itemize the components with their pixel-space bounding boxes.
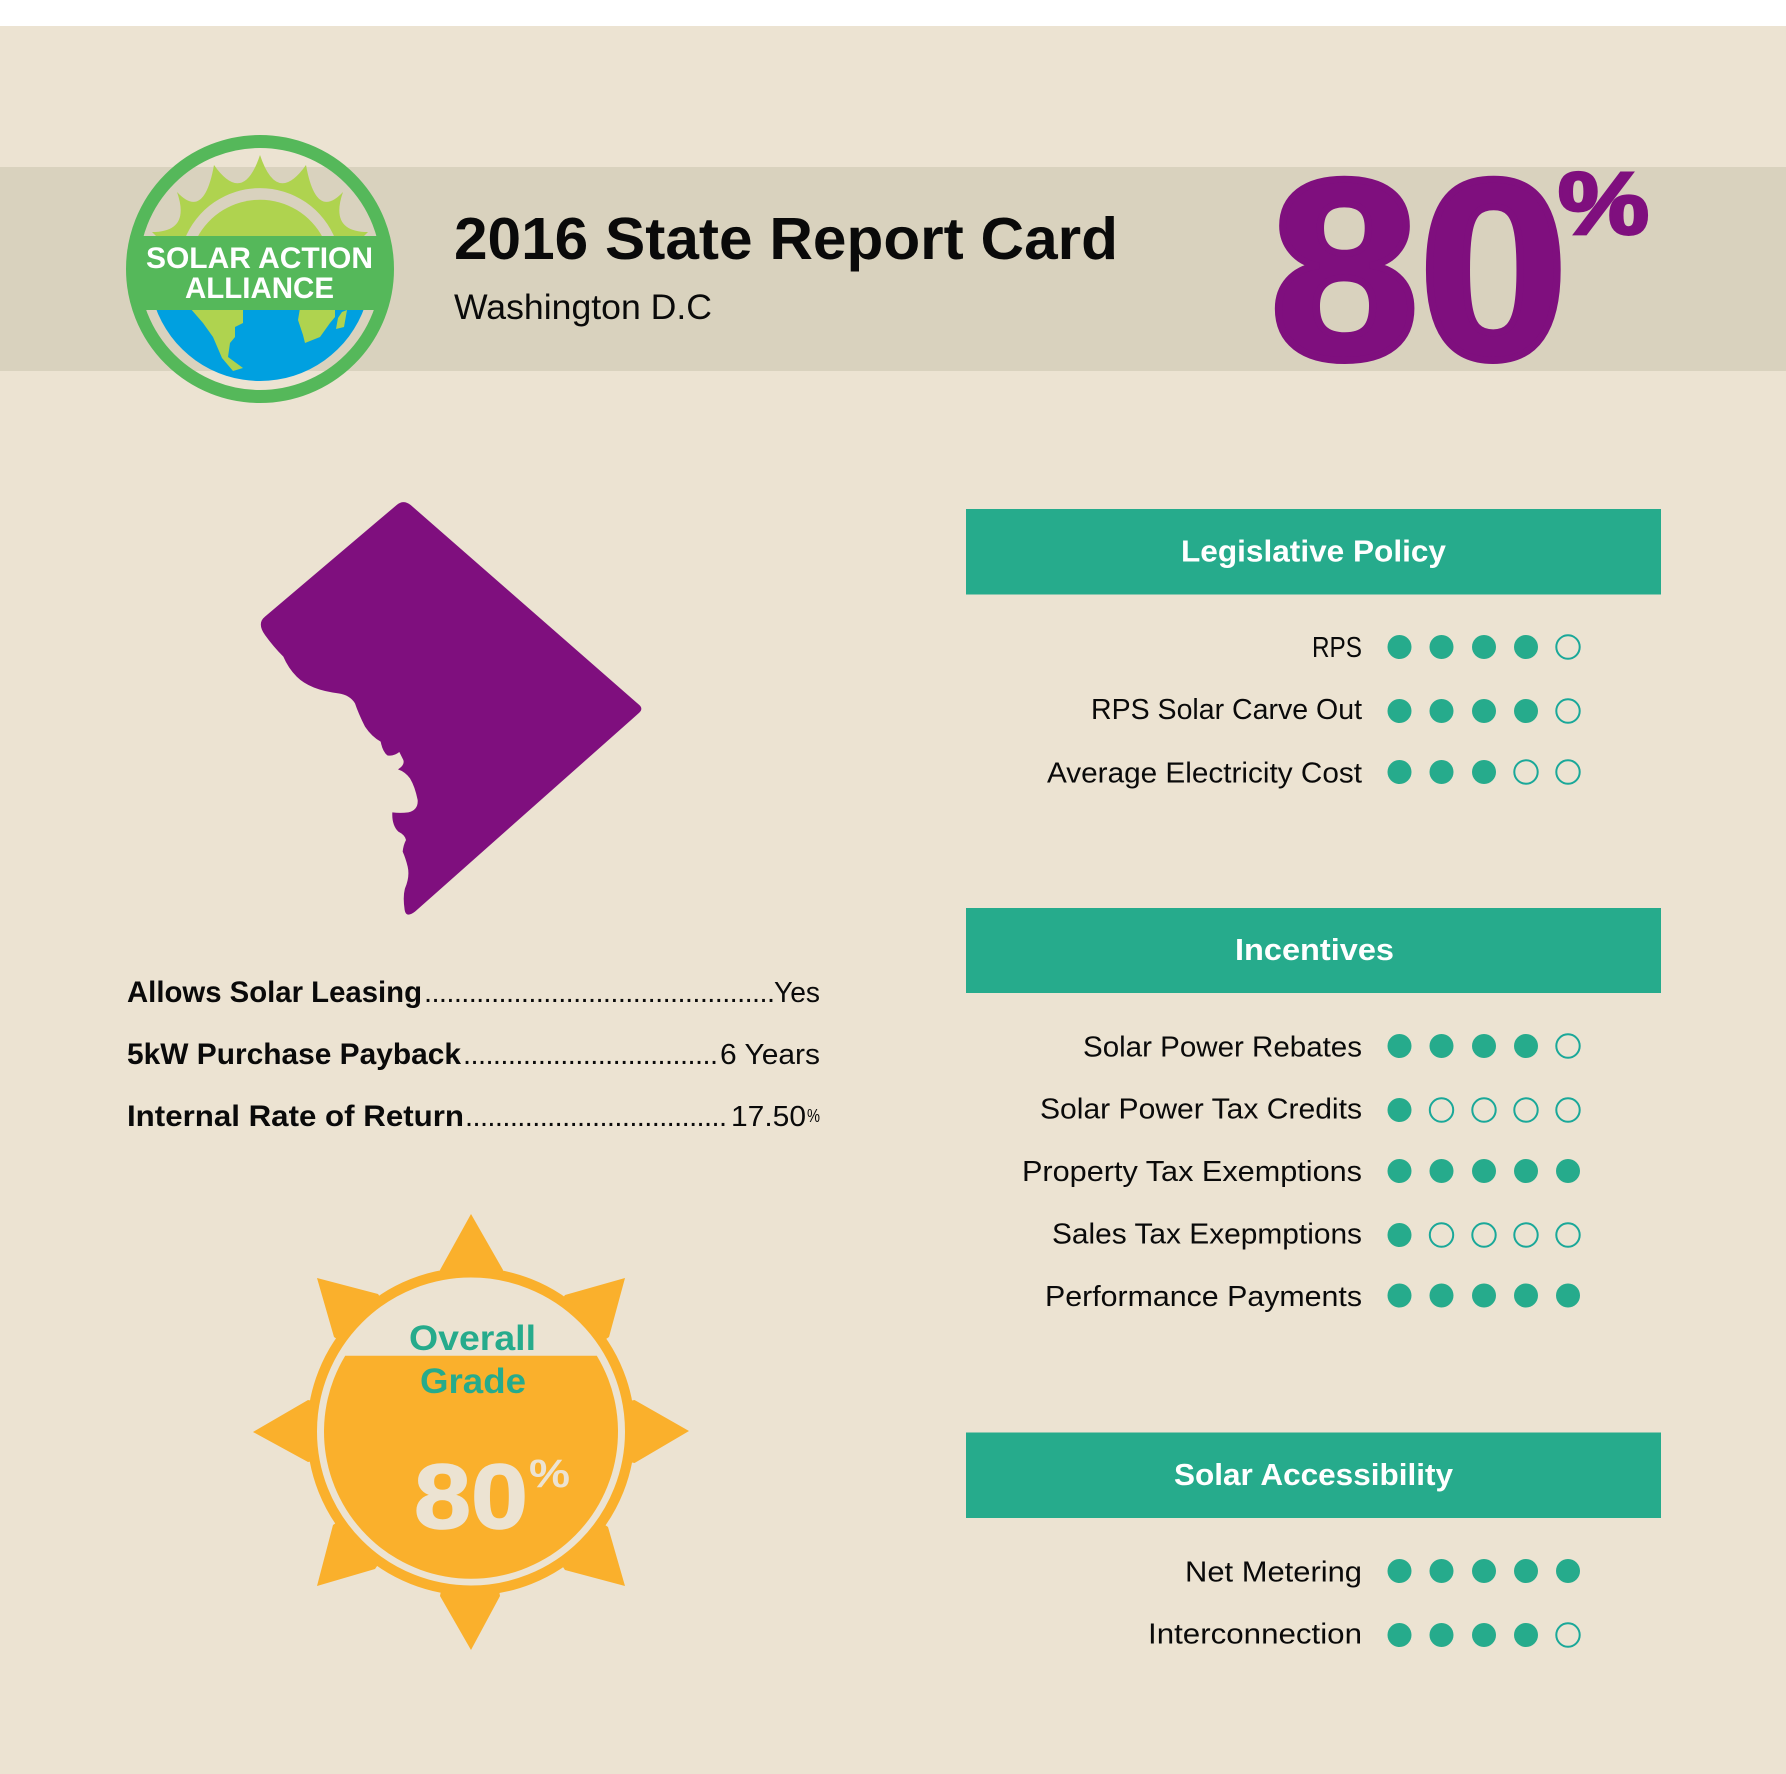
label: Grade: Grade	[420, 1362, 526, 1401]
panel: Incentives	[966, 908, 1661, 1313]
stat: internal rate of return: ...................................	[465, 1101, 727, 1133]
row: Average Electricity Cost	[1047, 758, 1580, 790]
row: Sales Tax Exepmptions: Sales Tax Exepmptions	[1052, 1218, 1362, 1250]
logo: Africa	[298, 308, 335, 343]
stats list	[127, 976, 820, 1133]
row: RPS Solar Carve Out	[1091, 694, 1580, 726]
label: Overall: Overall	[409, 1319, 536, 1358]
row: Solar Power Rebates	[1083, 1032, 1580, 1064]
logo: sun rays	[152, 155, 368, 240]
row: RPS: RPS	[1312, 632, 1362, 664]
stat: internal rate of return: 17.50	[731, 1101, 806, 1133]
heading text: Incentives	[1235, 932, 1394, 967]
stat: internal rate of return	[127, 1100, 820, 1133]
stat: allows solar leasing: Yes	[774, 977, 820, 1009]
row: RPS Solar Carve Out: RPS Solar Carve Out	[1091, 694, 1362, 726]
logo: Solar Action Alliance	[132, 142, 388, 396]
logo: name line 2: ALLIANCE	[185, 272, 334, 305]
row: Interconnection	[1148, 1618, 1580, 1650]
title: 2016 State Report Card	[454, 206, 1118, 272]
row: Solar Power Tax Credits: Solar Power Tax Credits	[1040, 1094, 1362, 1126]
overall grade sun badge	[253, 1214, 689, 1650]
row: Interconnection: Interconnection	[1148, 1618, 1362, 1650]
row: Solar Power Tax Credits	[1040, 1094, 1580, 1126]
stat: internal rate of return: Internal Rate of Return	[127, 1100, 464, 1133]
panel: Legislative Policy	[966, 509, 1661, 790]
stat: 5kW purchase payback	[127, 1038, 820, 1071]
big score: 80%	[1270, 127, 1649, 413]
big score percent sign: %	[1558, 154, 1649, 253]
row: Performance Payments	[1045, 1281, 1580, 1313]
logo: name line 1: SOLAR ACTION	[146, 242, 373, 275]
sun outer ring	[312, 1272, 630, 1590]
logo: South America	[190, 308, 243, 371]
logo: outer ring	[132, 142, 388, 396]
logo: sun disc	[197, 200, 323, 238]
sun rays	[253, 1214, 689, 1650]
row: Average Electricity Cost: Average Electricity Cost	[1047, 758, 1362, 790]
grade number: 80	[414, 1446, 528, 1548]
stat: 5kW purchase payback: 6 Years	[720, 1039, 820, 1071]
grade percent sign: %	[529, 1452, 570, 1496]
row: Net Metering	[1185, 1556, 1580, 1588]
heading text: Solar Accessibility	[1174, 1457, 1454, 1492]
stat: allows solar leasing	[127, 976, 820, 1009]
logo: globe ocean	[155, 306, 365, 381]
logo: Madagascar	[336, 310, 347, 329]
row: Performance Payments: Performance Payments	[1045, 1281, 1362, 1313]
heading text: Legislative Policy	[1181, 534, 1447, 568]
row: Solar Power Rebates: Solar Power Rebates	[1083, 1032, 1362, 1064]
stat: 5kW purchase payback: 5kW Purchase Payback	[127, 1038, 462, 1071]
stat: allows solar leasing: Allows Solar Leasing	[127, 976, 422, 1009]
panel: Solar Accessibility	[966, 1432, 1661, 1650]
row: RPS	[1312, 632, 1580, 664]
stat: allows solar leasing: ...............................................	[424, 977, 775, 1009]
map: Washington D.C. silhouette	[261, 502, 641, 915]
row: Property Tax Exemptions: Property Tax Exemptions	[1022, 1156, 1362, 1188]
logo: banner	[134, 236, 386, 310]
stat: 5kW purchase payback: ..................................	[463, 1039, 718, 1071]
row: Net Metering: Net Metering	[1185, 1556, 1362, 1588]
subtitle: Washington D.C	[454, 288, 712, 327]
heading bar	[966, 1432, 1661, 1518]
stat: internal rate of return: %	[807, 1106, 820, 1126]
heading bar	[966, 509, 1661, 594]
header band	[0, 167, 1786, 371]
row: Sales Tax Exepmptions	[1052, 1218, 1580, 1250]
sun inner disc segment	[324, 1356, 618, 1579]
heading bar	[966, 908, 1661, 993]
row: Property Tax Exemptions	[1022, 1156, 1580, 1188]
big score number: 80	[1270, 127, 1568, 413]
